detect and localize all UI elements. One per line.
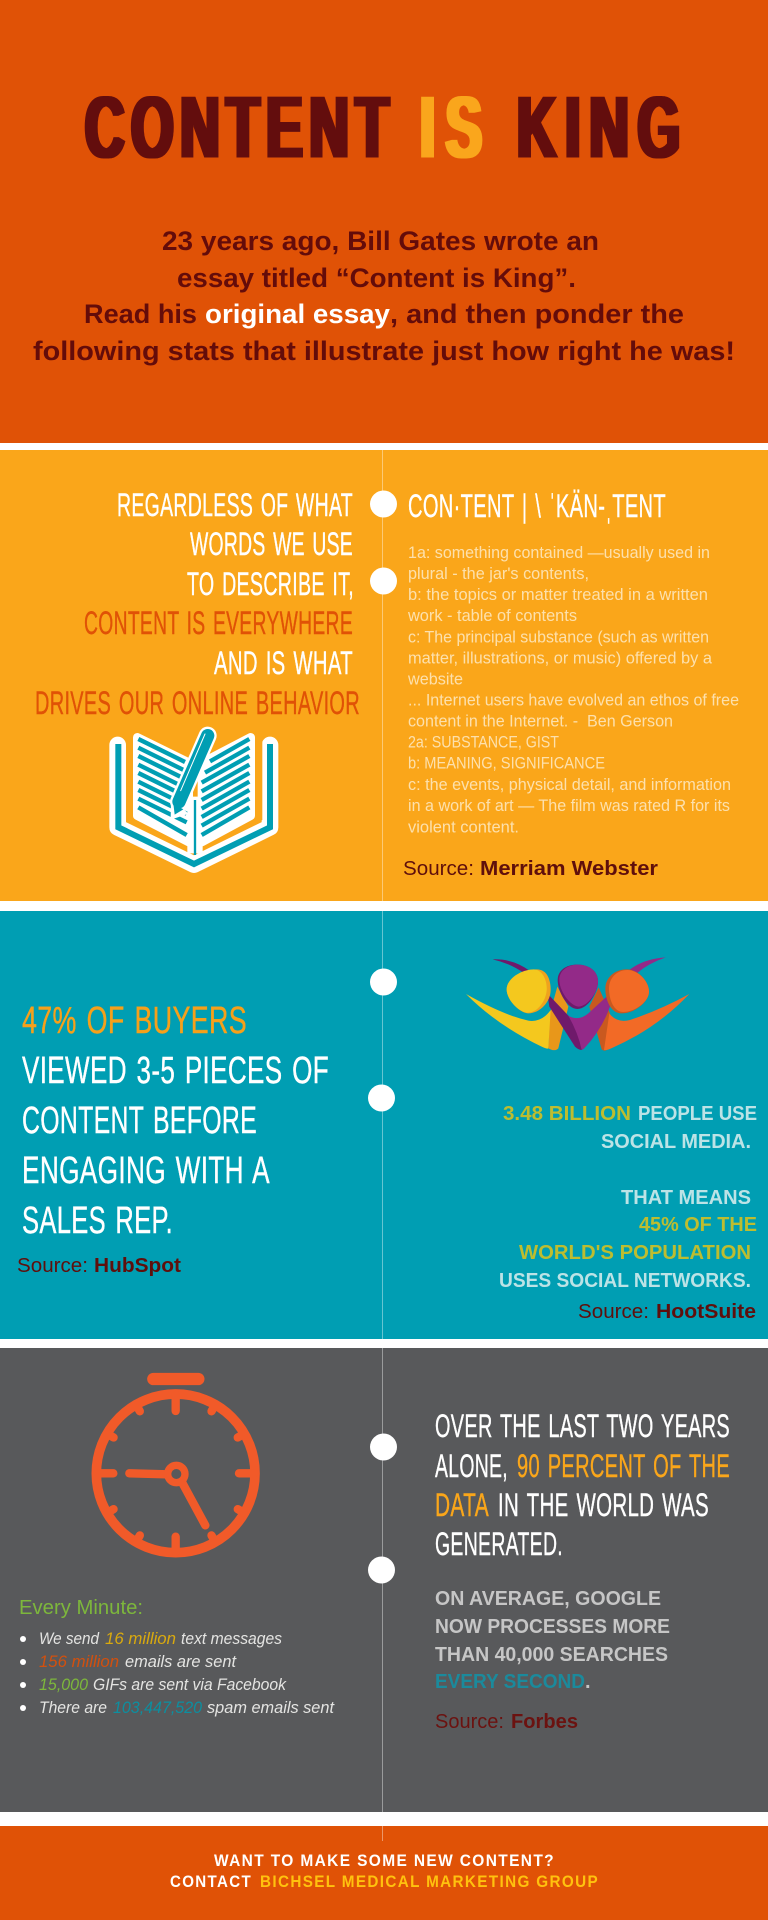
every minute list: 15,000 xyxy=(39,1675,89,1694)
timeline line xyxy=(382,450,384,1841)
intro text: essay titled “Content is King”. xyxy=(177,263,576,293)
data stat: ALONE, xyxy=(435,1448,508,1484)
definition body: 2a: SUBSTANCE, GIST xyxy=(408,734,559,752)
statement text: DRIVES OUR ONLINE BEHAVIOR xyxy=(35,685,360,721)
source: HootSuite xyxy=(578,1301,756,1323)
data stat: GENERATED. xyxy=(435,1526,563,1562)
title: IS xyxy=(420,78,482,177)
every minute list: text messages xyxy=(181,1629,282,1648)
definition body: website xyxy=(407,670,463,688)
statement text: REGARDLESS OF WHAT xyxy=(117,487,353,523)
every minute list xyxy=(20,1629,335,1717)
social media stat: 3.48 BILLION xyxy=(503,1103,631,1125)
statement text: WORDS WE USE xyxy=(190,526,353,562)
buyers stat: 47% OF BUYERS xyxy=(22,1000,247,1042)
google stat: ON AVERAGE, GOOGLE xyxy=(435,1588,661,1610)
statement text: CONTENT IS EVERYWHERE xyxy=(84,605,353,641)
call to action: WANT TO MAKE SOME NEW CONTENT? xyxy=(214,1851,555,1870)
definition body: ... Internet users have evolved an ethos of free xyxy=(408,692,739,710)
definition body: plural - the jar's contents, xyxy=(408,565,589,583)
call to action: BICHSEL MEDICAL MARKETING GROUP xyxy=(260,1872,599,1891)
panel: footer xyxy=(0,1826,768,1920)
source: HootSuite: HootSuite xyxy=(656,1301,756,1323)
call to action xyxy=(170,1851,599,1891)
google stat: THAN 40,000 SEARCHES xyxy=(435,1644,668,1666)
definition body: violent content. xyxy=(408,818,519,836)
definition body: matter, illustrations, or music) offered by a xyxy=(408,649,713,667)
definition body: b: MEANING, SIGNIFICANCE xyxy=(408,755,605,773)
definition body: b: the topics or matter treated in a written xyxy=(408,586,708,604)
social media stat: PEOPLE USE xyxy=(638,1103,757,1125)
definition body: in a work of art — The film was rated R for its xyxy=(408,797,730,815)
definition body: content in the Internet. - Ben Gerson xyxy=(408,713,673,731)
every minute list: 16 million xyxy=(105,1629,176,1648)
statement text: TO DESCRIBE IT, xyxy=(187,566,354,602)
title: CONTENT xyxy=(85,78,389,177)
every minute list: There are xyxy=(39,1698,107,1717)
data stat: DATA xyxy=(435,1487,489,1523)
every minute list: We send xyxy=(39,1629,99,1648)
buyers stat: SALES REP. xyxy=(22,1200,173,1242)
source: Forbes: Forbes xyxy=(511,1711,578,1733)
call to action: CONTACT xyxy=(170,1872,252,1891)
panel: definition xyxy=(0,450,768,901)
buyers stat: VIEWED 3-5 PIECES OF xyxy=(22,1050,329,1092)
google stat: EVERY SECOND xyxy=(435,1671,585,1693)
social media stat: SOCIAL MEDIA. xyxy=(601,1131,751,1153)
icon: open book with pen xyxy=(118,734,270,865)
google stat: . xyxy=(585,1671,591,1693)
icon: three people xyxy=(466,957,689,1051)
every minute list: emails are sent xyxy=(125,1652,237,1671)
source: HootSuite: Source: xyxy=(578,1301,649,1323)
statement text xyxy=(35,487,360,721)
icon: stopwatch xyxy=(96,1379,255,1553)
intro text: 23 years ago, Bill Gates wrote an xyxy=(162,226,599,256)
source: HubSpot: Source: xyxy=(17,1255,88,1277)
every minute list: 156 million xyxy=(39,1652,119,1671)
social media stat: WORLD'S POPULATION xyxy=(519,1242,751,1264)
timeline dots xyxy=(368,490,397,1584)
data stat xyxy=(435,1408,730,1562)
source: Forbes xyxy=(435,1711,578,1733)
title: KING xyxy=(517,78,680,177)
title xyxy=(85,78,680,177)
source: HubSpot: HubSpot xyxy=(94,1255,181,1277)
panel: header xyxy=(0,0,768,443)
definition body: 1a: something contained —usually used in xyxy=(408,544,710,562)
source: HubSpot xyxy=(17,1255,181,1277)
definition body: c: The principal substance (such as written xyxy=(408,628,709,646)
intro text: following stats that illustrate just how right he was! xyxy=(33,336,735,366)
social media stat: THAT MEANS xyxy=(621,1187,751,1209)
statement text: AND IS WHAT xyxy=(214,645,353,681)
social media stat: USES SOCIAL NETWORKS. xyxy=(499,1270,751,1292)
every minute list: spam emails sent xyxy=(207,1698,335,1717)
source: Merriam Webster: Source: xyxy=(403,858,474,880)
panel: buyers and social media xyxy=(0,911,768,1339)
every minute heading: Every Minute: xyxy=(19,1596,143,1619)
google stat: NOW PROCESSES MORE xyxy=(435,1616,670,1638)
social media stat: 45% OF THE xyxy=(639,1214,757,1236)
google stat xyxy=(435,1588,670,1693)
intro text xyxy=(33,226,735,366)
every minute list: 103,447,520 xyxy=(113,1698,203,1717)
definition body: c: the events, physical detail, and information xyxy=(408,776,731,794)
source: Merriam Webster xyxy=(403,858,658,880)
intro text: Read his xyxy=(84,299,197,329)
definition body xyxy=(407,544,739,836)
source: Merriam Webster: Merriam Webster xyxy=(480,858,658,880)
buyers stat: ENGAGING WITH A xyxy=(22,1150,270,1192)
social media stat xyxy=(499,1103,757,1292)
buyers stat xyxy=(22,1000,329,1242)
source: Forbes: Source: xyxy=(435,1711,504,1733)
intro text: , and then ponder the xyxy=(390,299,684,329)
buyers stat: CONTENT BEFORE xyxy=(22,1100,257,1142)
panel: data statistics xyxy=(0,1348,768,1812)
intro text: original essay xyxy=(205,299,390,329)
definition body: work - table of contents xyxy=(407,607,577,625)
every minute list: GIFs are sent via Facebook xyxy=(93,1675,287,1694)
